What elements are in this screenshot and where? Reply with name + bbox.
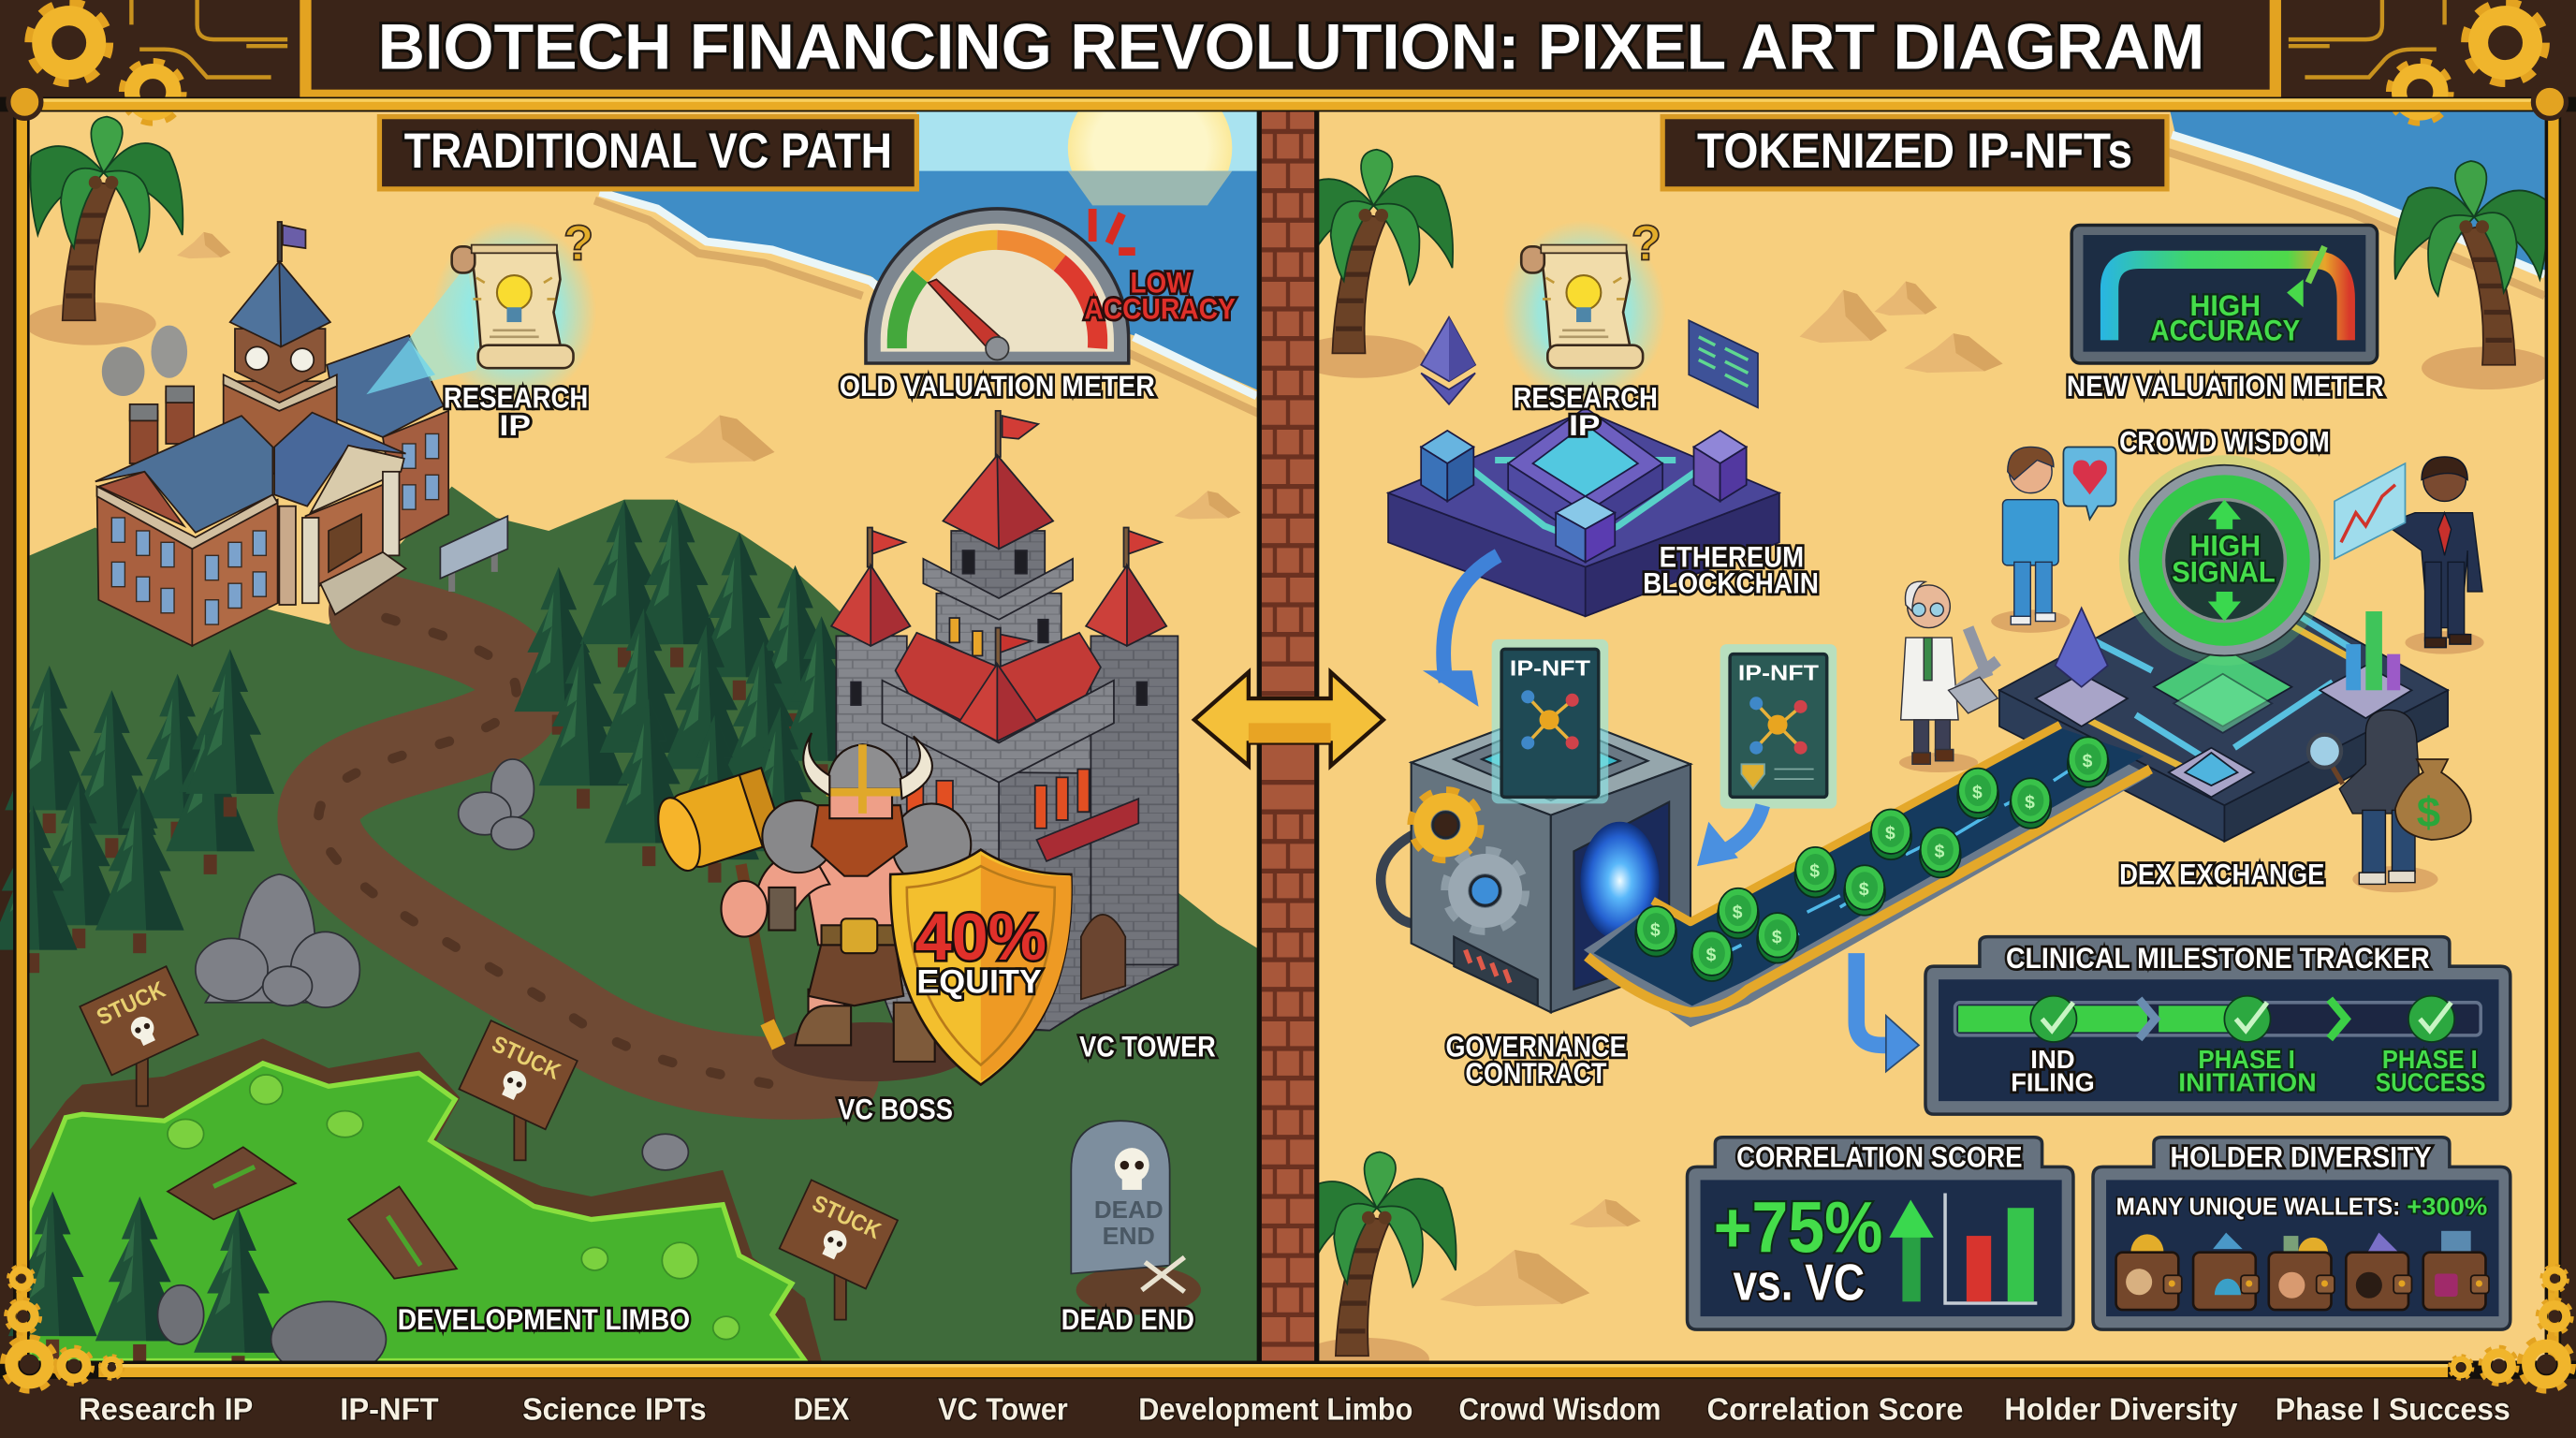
label: research IP: RESEARCH [1513,380,1658,414]
new valuation meter: HIGH [2190,288,2261,322]
spires [943,455,1053,549]
torso and arms [721,846,903,953]
label: research IP [444,380,588,442]
header band [0,0,2576,121]
legend terms: Correlation Score [1707,1393,1963,1428]
stuck warning signs: STUCK [93,977,169,1031]
sky and sun [916,72,1260,224]
legend terms: IP-NFT [340,1393,439,1428]
campus sign [440,516,507,592]
university building [95,222,448,646]
right tower [1090,636,1178,964]
heading: traditional VC path: TRADITIONAL VC PATH [404,124,892,179]
milestone progress bar [1955,996,2481,1042]
IP-NFT card floating [1720,644,1837,809]
floating data panel [1689,320,1758,407]
label: dead end: DEAD END [1061,1302,1194,1336]
grass field [30,487,1260,1360]
legend terms: VC Tower [938,1393,1068,1428]
label: old valuation meter: OLD VALUATION METER [840,369,1155,403]
flags [868,411,1162,668]
tower [224,381,337,477]
mid and upper central towers [936,594,1061,670]
dunes [1440,282,2003,1306]
hammer [651,768,784,1047]
token conveyor [1584,725,2150,1027]
main roofs [95,416,272,533]
dex token and bars [2056,609,2400,690]
right header gears and circuit [2289,0,2542,121]
investor in suit [2392,457,2484,654]
palm tree [24,117,183,345]
brick walls [97,487,192,646]
+75% stat: +75% [1714,1188,1882,1269]
double-headed gold arrow [1194,672,1383,766]
chart hologram [2334,463,2405,559]
legend terms: Research IP [79,1393,253,1428]
wallets [2116,1231,2489,1310]
milestone labels [2011,1045,2485,1097]
footer legend [0,1267,2576,1438]
research IP scroll [1501,215,1666,404]
money bag: $ [2417,788,2440,836]
IP-NFT card on machine [1492,639,1608,803]
stuck warning signs [80,966,898,1326]
low accuracy callout: LOW [1131,265,1192,299]
swamp bubbles [168,1075,739,1340]
VC boss viking [651,733,971,1081]
research IP scroll: ? [1632,215,1661,271]
node cubes [1421,431,1747,562]
palm trees [1295,150,2553,1381]
panel: tokenized IP-NFTs [1295,111,2553,1381]
development limbo swamp [30,1038,822,1360]
milestone labels: PHASE I [2198,1045,2295,1074]
governance contract machine [1381,710,1690,1012]
+75% stat [1714,1188,1882,1312]
sea with foam [594,171,1260,414]
magnifier [2308,735,2343,784]
gravestone: DEAD [1094,1196,1164,1224]
low accuracy callout [1084,209,1236,326]
legend terms: Science IPTs [522,1393,707,1428]
hooded trader [2339,710,2438,892]
forest: left cluster [0,649,274,973]
label: new valuation meter: NEW VALUATION METER [2067,369,2384,403]
scientist with microscope [1899,581,1998,772]
right frame rail [2545,102,2561,1368]
stuck warning signs: STUCK [809,1191,885,1244]
new valuation meter: ACCURACY [2150,313,2300,346]
label: crowd wisdom: CROWD WISDOM [2119,425,2330,459]
sunken planks [168,1147,457,1279]
label: VC tower: VC TOWER [1079,1030,1216,1064]
milestone labels: INITIATION [2178,1068,2317,1097]
windows [851,550,1147,705]
correlation score panel [1687,1137,2073,1329]
money bag [2395,759,2471,840]
bottom gold rail [0,1360,2576,1379]
forest: middle cluster [514,500,866,883]
wallets stat line: +300% [2407,1192,2487,1220]
label: research IP: IP [500,408,531,442]
new valuation meter [2071,225,2378,363]
heading: traditional VC path [379,117,916,189]
conveyor coins [1635,737,2109,981]
portico [305,485,383,594]
exchange arrows [2078,616,2352,756]
left frame rail [13,102,30,1368]
dunes [177,232,1240,520]
high signal ring [2119,455,2330,666]
legs and kilt [795,944,935,1062]
mini bar chart [1945,1193,2037,1303]
legend terms: Crowd Wisdom [1459,1393,1661,1428]
label: ethereum blockchain: BLOCKCHAIN [1643,566,1819,600]
milestone labels: PHASE I [2382,1045,2478,1074]
head, beard and helmet [803,733,932,876]
title plate: BIOTECH FINANCING REVOLUTION: PIXEL ART DIAGRAM [378,11,2204,83]
label: development limbo: DEVELOPMENT LIMBO [398,1302,690,1336]
milestone labels: IND [2030,1045,2075,1074]
ethereum blockchain platform [1388,407,1779,616]
label: VC boss: VC BOSS [838,1092,953,1125]
+75% stat: vs. VC [1734,1255,1865,1312]
wallets stat line: MANY UNIQUE WALLETS: [2116,1192,2400,1220]
label: ethereum blockchain: ETHEREUM [1660,540,1804,574]
patient figure [1991,447,2070,633]
IP-NFT card floating: IP-NFT [1738,661,1819,685]
label: research IP [1513,380,1658,442]
40% equity shield: EQUITY [916,963,1042,1000]
holder diversity panel: HOLDER DIVERSITY [2170,1139,2432,1173]
low accuracy callout: ACCURACY [1084,292,1236,326]
chain links [1471,461,1701,542]
top gold rail [0,97,2576,111]
legend terms: Development Limbo [1138,1393,1412,1428]
IP-NFT card on machine: IP-NFT [1510,655,1590,680]
label: governance contract [1445,1030,1627,1090]
clinical milestone tracker [1925,937,2510,1114]
lower red roof [896,633,1101,740]
sea and foam [2165,111,2545,296]
windows [111,433,439,624]
blue flow arrow: conveyor to tracker [1856,953,1919,1072]
back wing [383,411,448,541]
corner bolts [8,85,2566,118]
40% equity shield: 40% [915,900,1046,974]
research IP scroll [432,215,596,404]
shoulders [762,800,971,886]
40% equity shield [890,850,1072,1085]
up arrow [1889,1199,1934,1301]
research IP scroll: ? [564,215,593,271]
research IP glow beam [409,263,476,381]
milestone labels: FILING [2011,1068,2095,1097]
clinical milestone tracker: CLINICAL MILESTONE TRACKER [2006,941,2430,975]
legend terms: DEX [794,1393,849,1428]
correlation score panel: CORRELATION SCORE [1736,1139,2023,1173]
holder diversity panel [2093,1137,2510,1329]
high signal ring: HIGH [2190,528,2261,562]
corner gears [5,1267,2571,1388]
legend terms: Holder Diversity [2004,1393,2238,1428]
DEX exchange platform [1999,568,2448,842]
high signal ring: SIGNAL [2172,554,2276,588]
blue flow arrow: blockchain to contract [1423,555,1499,707]
gravestone [1071,1121,1201,1314]
red windows [907,770,1090,829]
label: research IP: RESEARCH [444,380,588,414]
brick divider [1257,111,1319,1360]
panel: traditional VC path [0,72,1260,1377]
gravestone: END [1103,1222,1155,1250]
title plate [305,0,2276,95]
winding dirt path [318,611,838,1088]
trees and rocks at the lower left [8,1192,386,1377]
main wall [855,681,1178,1031]
blue flow arrow: card to contract [1697,805,1763,866]
legend terms: Phase I Success [2276,1393,2510,1428]
label: ethereum blockchain [1643,540,1819,600]
left header gears and circuit [32,0,287,121]
label: governance contract: CONTRACT [1466,1056,1606,1090]
label: research IP: IP [1569,408,1600,442]
center block [1508,407,1662,539]
old valuation gauge [866,209,1129,363]
smoke and chimneys [102,326,194,463]
label: dex exchange: DEX EXCHANGE [2119,857,2324,890]
heart speech bubble [2063,447,2116,520]
control panel [1454,937,1538,1005]
rock clusters [196,759,688,1170]
pads [2154,648,2291,726]
gears [1413,793,1478,857]
left tower [836,636,907,833]
heading: tokenized IP-NFTs: TOKENIZED IP-NFTs [1697,124,2132,179]
milestone labels: SUCCESS [2376,1068,2485,1097]
ethereum diamond [1421,317,1475,404]
VC tower castle [831,411,1178,1031]
stuck warning signs: STUCK [488,1032,564,1085]
portal [1573,802,1669,990]
label: governance contract: GOVERNANCE [1445,1030,1627,1064]
legend terms [79,1393,2510,1428]
